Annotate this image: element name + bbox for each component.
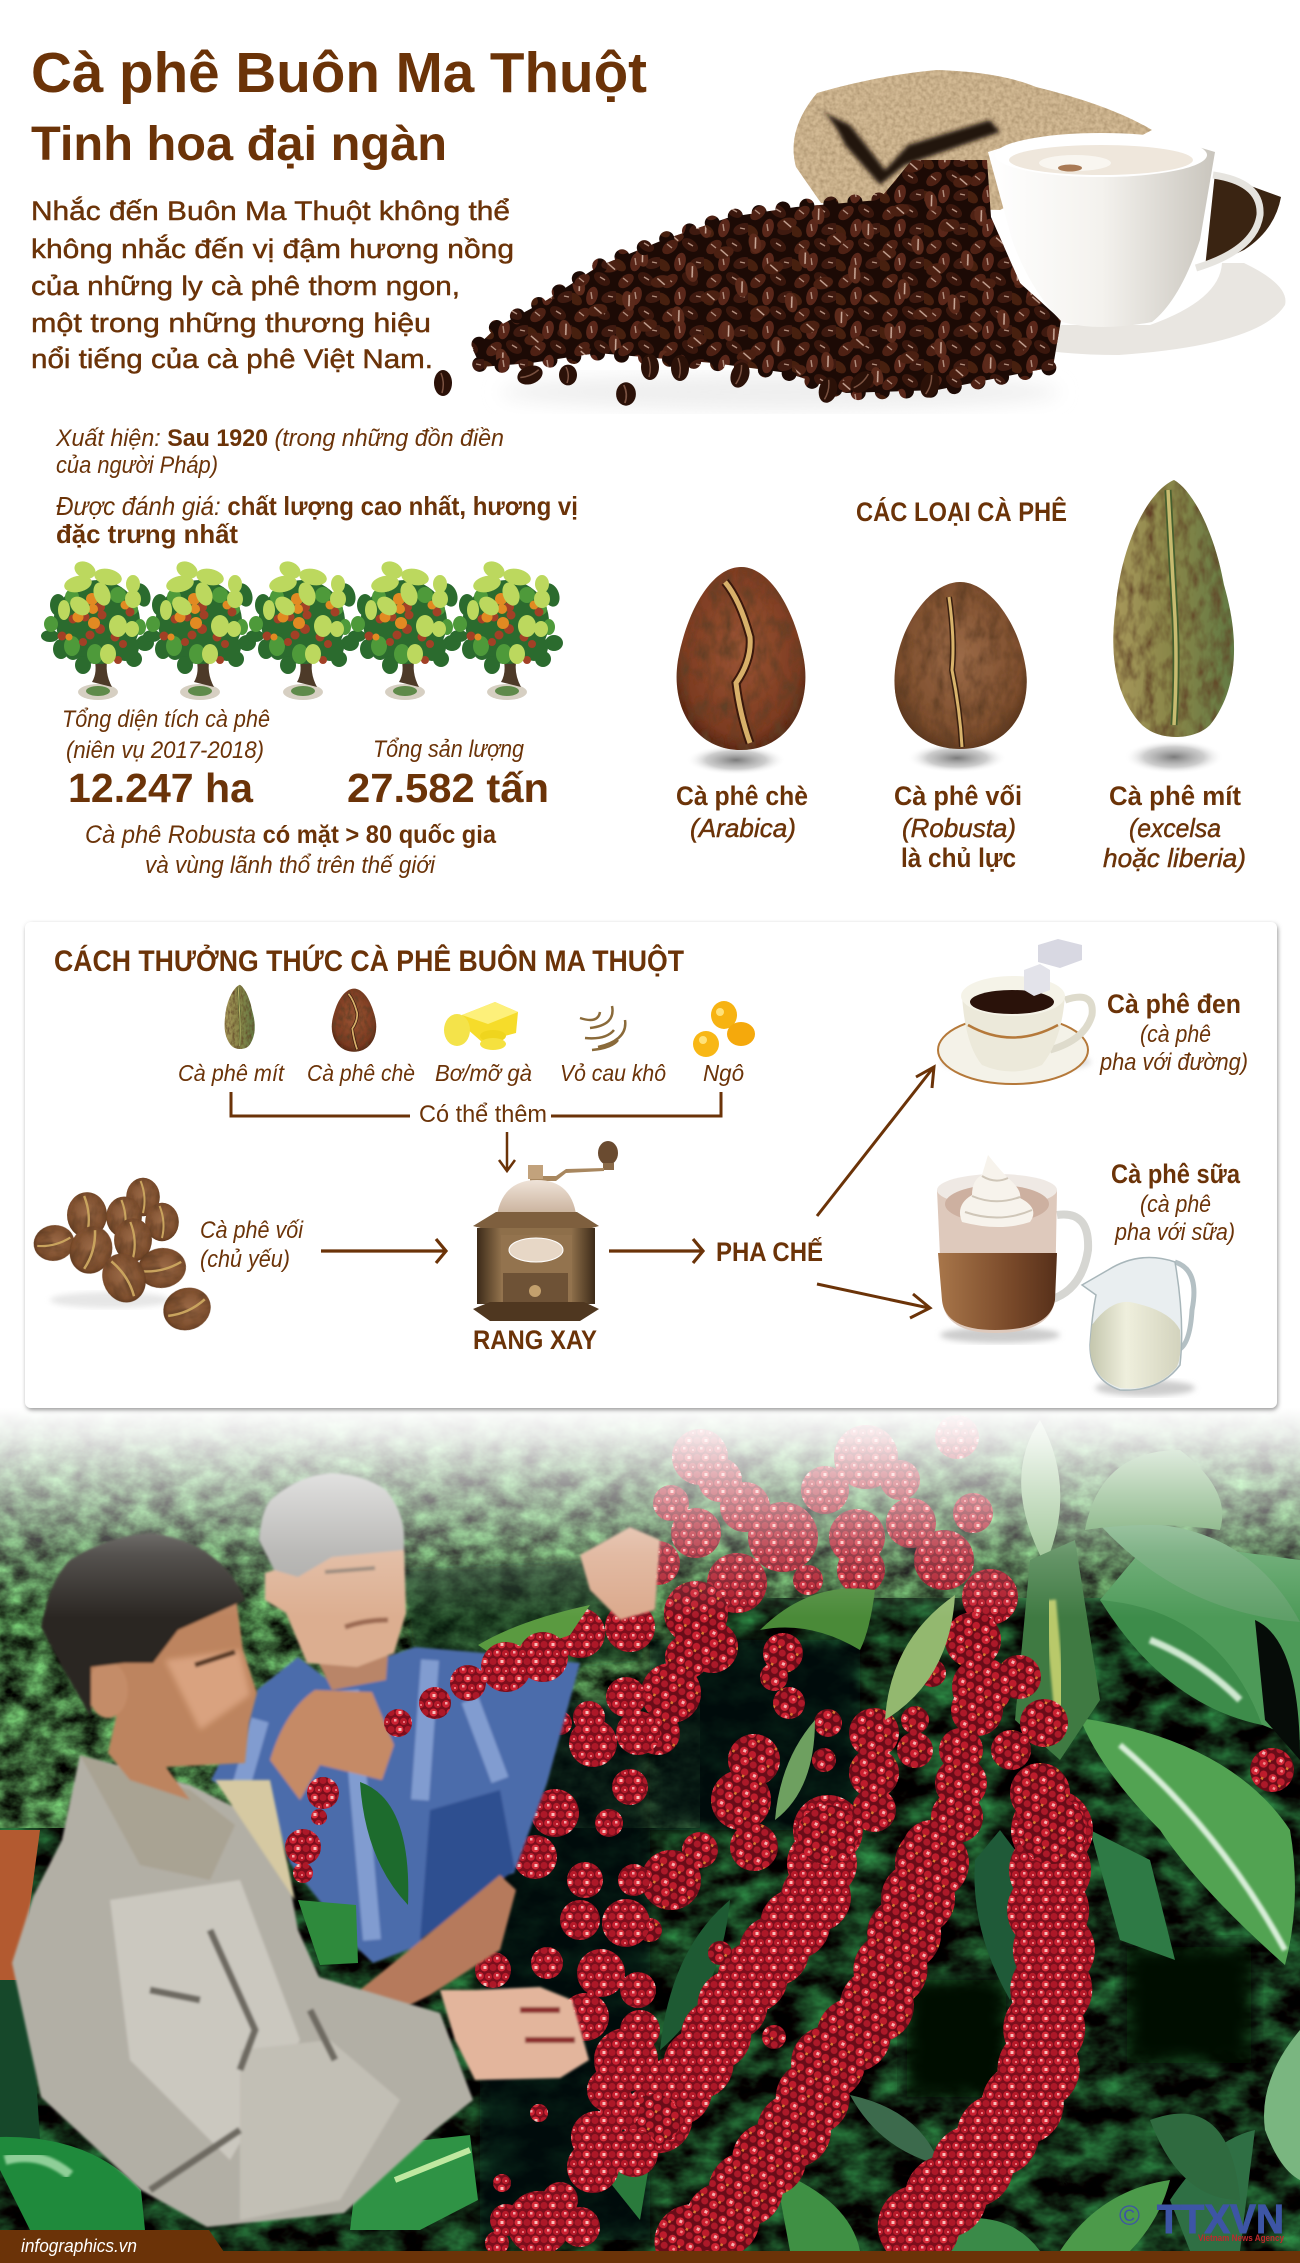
- tree 5: [450, 558, 563, 700]
- bean type: excelsa: [1103, 480, 1246, 873]
- bean type: robusta: (Robusta): [902, 813, 1016, 843]
- tree 1: [41, 558, 154, 700]
- panel card: [25, 922, 1277, 1408]
- stat: total output: 27.582 tấn: [347, 765, 549, 811]
- ear: [88, 1662, 128, 1718]
- intro text block: [31, 195, 514, 374]
- stat: total area: [62, 706, 270, 811]
- bean type: excelsa: (excelsa: [1129, 813, 1221, 843]
- facts: appearance and rating: [55, 425, 578, 549]
- ingredient labels: Cà phê mít: [178, 1060, 286, 1086]
- chain: middle: [683, 1863, 932, 2247]
- icon: corn kernels: [693, 1001, 755, 1057]
- leaf below shirt: [298, 1900, 358, 1965]
- stat: total output: [347, 736, 549, 811]
- label: black coffee: Cà phê đen: [1107, 989, 1241, 1019]
- photo: farmers harvesting red coffee cherries: [0, 1408, 1300, 2255]
- logo: TTXVN: ©: [1119, 2200, 1140, 2231]
- bean type: robusta: là chủ lực: [901, 843, 1016, 873]
- ingredient labels: [178, 1060, 744, 1086]
- dark gaps between clusters: [907, 1980, 1006, 2097]
- robusta note: [85, 821, 497, 879]
- hand on berries: [440, 1987, 589, 2080]
- header image: coffee beans, sack and cup: [434, 70, 1285, 410]
- berry clusters: [650, 1830, 1056, 2247]
- bright leaves over berries: [478, 1588, 955, 1820]
- intro text block: Nhắc đến Buôn Ma Thuột không thể: [31, 195, 510, 226]
- stat: total area: 12.247 ha: [68, 765, 254, 811]
- lower hand: [360, 1875, 516, 2020]
- icon: milk jug: [1082, 1258, 1195, 1396]
- jacket: [12, 1755, 473, 2227]
- label: roast and grind: RANG XAY: [473, 1325, 597, 1355]
- facts: appearance and rating: Được đánh giá: chất lượng cao nhất, hương vị: [56, 491, 578, 521]
- photo base foliage: [0, 1598, 1300, 2251]
- dark sack behind mug: [1205, 173, 1281, 268]
- arrow: grinder to brewing: [609, 1239, 703, 1263]
- ingredient labels: Cà phê chè: [307, 1060, 415, 1086]
- icon: robusta beans pile: [31, 1178, 217, 1337]
- icon: arabica bean: [332, 989, 376, 1052]
- robusta note: và vùng lãnh thổ trên thế giới: [145, 852, 436, 879]
- label: black coffee: pha với đường): [1099, 1049, 1248, 1076]
- neck and face: [87, 1590, 257, 1800]
- label: milk coffee: pha với sữa): [1114, 1219, 1235, 1246]
- label: milk coffee: Cà phê sữa: [1111, 1159, 1241, 1189]
- bean type: arabica: Cà phê chè: [676, 781, 808, 811]
- icon: coffee grinder: [473, 1141, 618, 1321]
- chain: right: [915, 1830, 1056, 2230]
- subtitle: Tinh hoa đại ngàn: [31, 118, 447, 171]
- white mug: [988, 134, 1215, 327]
- cluster along shirt and hand: [285, 1632, 568, 1883]
- leaf on shirt: [360, 1782, 408, 1905]
- raised hand: [270, 1690, 394, 1800]
- bean type: excelsa: Cà phê mít: [1109, 781, 1241, 811]
- grey hair: [259, 1473, 404, 1577]
- bean type: arabica: (Arabica): [690, 813, 796, 843]
- soft shadow under beans: [500, 374, 1060, 410]
- tree 4: [348, 558, 461, 700]
- logo: TTXVN: Vietnam News Agency: [1198, 2233, 1285, 2244]
- chain: left: [650, 1830, 828, 2130]
- berry blobs: upper right: [636, 1415, 1018, 1625]
- intro text block: không nhắc đến vị đậm hương nồng: [31, 233, 514, 264]
- icon: excelsa bean: [225, 985, 255, 1049]
- icon: dried areca husk: [580, 1006, 625, 1050]
- ingredient labels: Ngô: [703, 1060, 744, 1086]
- arrow: beans to grinder: [321, 1239, 446, 1263]
- farmer: older man in blue shirt: [211, 1473, 660, 2020]
- ingredient labels: Vỏ cau khô: [560, 1060, 666, 1086]
- burlap sack: [794, 70, 1152, 210]
- ingredient labels: Bơ/mỡ gà: [435, 1060, 532, 1086]
- footer tab: [0, 2230, 224, 2252]
- footer bar: [0, 2230, 1300, 2263]
- face: [265, 1543, 406, 1667]
- blue shirt: [211, 1647, 580, 1963]
- intro text block: nổi tiếng của cà phê Việt Nam.: [31, 344, 433, 374]
- neck: [318, 1654, 390, 1692]
- bracket: can add: [231, 1092, 721, 1128]
- stat: total area: (niên vụ 2017-2018): [66, 737, 264, 764]
- coffee trees row: [41, 558, 563, 700]
- bean type: arabica: [676, 567, 808, 843]
- logo: TTXVN: TTXVN: [1157, 2196, 1284, 2242]
- arrow: to black coffee: [817, 1067, 934, 1216]
- top white fade: [0, 1408, 1300, 1618]
- panel: how to enjoy Buon Ma Thuot coffee: [25, 922, 1277, 1408]
- bean pile: [473, 160, 1061, 393]
- icon: black coffee cup: [938, 939, 1092, 1084]
- facts: appearance and rating: của người Pháp): [56, 452, 218, 479]
- saucer: [941, 263, 1285, 355]
- scattered beans: [434, 354, 943, 406]
- label: robusta main: Cà phê vối: [200, 1217, 304, 1244]
- label: brewing: PHA CHẾ: [716, 1236, 823, 1267]
- shirt collar: [215, 1780, 295, 1900]
- label: black coffee: [1099, 989, 1248, 1076]
- tree 2: [143, 558, 256, 700]
- title: Cà phê Buôn Ma Thuột: [31, 41, 647, 105]
- berry blobs: centre: [467, 1602, 660, 2255]
- panel heading: CÁCH THƯỞNG THỨC CÀ PHÊ BUÔN MA THUỘT: [54, 944, 684, 978]
- bean type: robusta: [894, 582, 1027, 873]
- bean type: robusta: Cà phê vối: [894, 781, 1022, 811]
- facts: appearance and rating: đặc trưng nhất: [56, 519, 238, 549]
- heading: coffee types: CÁC LOẠI CÀ PHÊ: [856, 496, 1067, 527]
- facts: appearance and rating: Xuất hiện: Sau 1920 (trong những đồn điền: [55, 425, 504, 452]
- top right hand: [580, 1527, 660, 1620]
- green leaves: [0, 1420, 1300, 2251]
- intro text block: của những ly cà phê thơm ngon,: [31, 271, 460, 301]
- stat: total output: Tổng sản lượng: [373, 736, 525, 763]
- tree 3: [246, 558, 359, 700]
- robusta note: Cà phê Robusta có mặt > 80 quốc gia: [85, 821, 497, 849]
- stat: total area: Tổng diện tích cà phê: [62, 706, 270, 733]
- bracket: can add: Có thể thêm: [419, 1101, 547, 1128]
- label: robusta main: [200, 1217, 304, 1273]
- farmer: front man in grey jacket: [12, 1533, 589, 2227]
- arrow: down to grinder: [499, 1132, 515, 1171]
- icon: latte glass with cream: [937, 1155, 1088, 1343]
- label: black coffee: (cà phê: [1140, 1021, 1211, 1048]
- handle: [1196, 175, 1260, 268]
- bean type: excelsa: hoặc liberia): [1103, 843, 1246, 873]
- label: milk coffee: [1111, 1159, 1241, 1246]
- source label: infographics.vn: [21, 2236, 137, 2256]
- dark hair: [41, 1533, 245, 1717]
- label: robusta main: (chủ yếu): [200, 1246, 290, 1273]
- soil at left edge: [0, 1830, 40, 1980]
- icon: butter: [444, 1002, 518, 1050]
- intro text block: một trong những thương hiệu: [31, 308, 431, 338]
- label: milk coffee: (cà phê: [1140, 1191, 1211, 1218]
- arrow: to milk coffee: [817, 1284, 930, 1318]
